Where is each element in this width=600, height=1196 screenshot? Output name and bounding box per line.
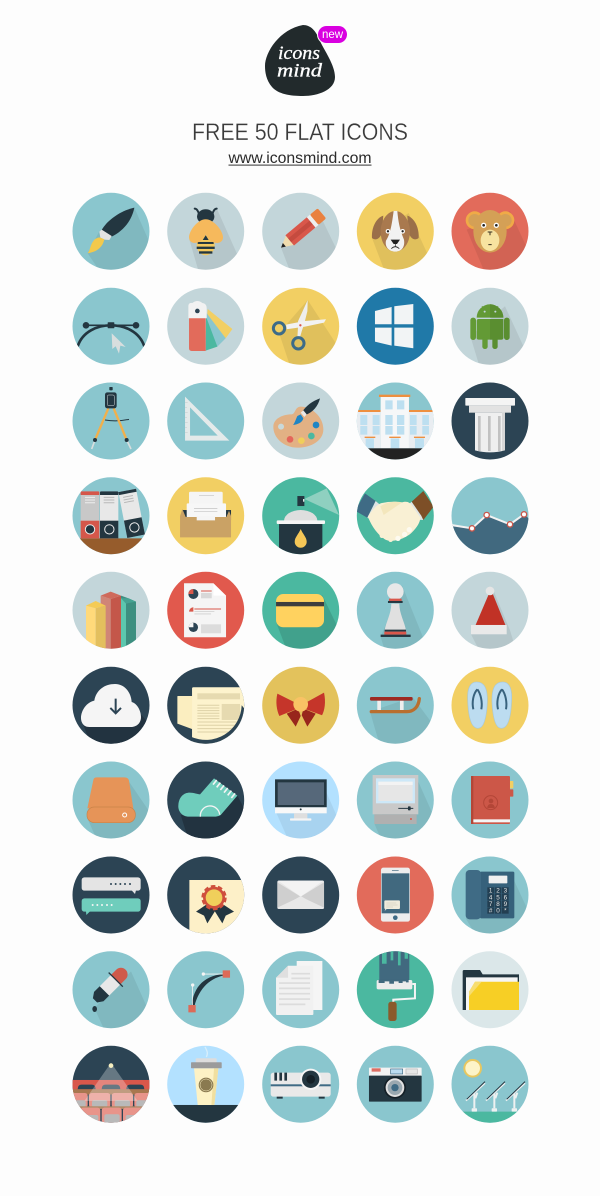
logo: iconsmind blob with new badge: new (322, 29, 344, 41)
icon: hard drive (73, 762, 150, 842)
website link: www.iconsmind.com (227, 150, 372, 167)
icon: set square (167, 383, 244, 459)
icon: monkey (452, 193, 530, 273)
icon: camera (357, 1046, 434, 1123)
icon: paper documents (262, 951, 339, 1028)
icon: smartphone (357, 857, 434, 933)
icon: bee (167, 193, 244, 273)
icon: chat bubbles (73, 857, 149, 933)
icon: newspaper (167, 667, 244, 745)
icon: desk telephone: 5 (496, 894, 500, 901)
icon: desk telephone (452, 857, 529, 937)
icon: desktop monitor (262, 762, 340, 842)
icon: cloud download (73, 667, 150, 747)
logo: iconsmind blob with new badge: mind (277, 60, 323, 82)
icon: chess pawn (357, 572, 434, 652)
icon: office building (357, 383, 434, 462)
icon: eyedropper (73, 951, 150, 1031)
icon: pencil (262, 193, 339, 273)
icon: paint brush (73, 193, 153, 273)
icon: pen tool curve (167, 951, 244, 1028)
icon: desk telephone: 3 (504, 888, 508, 895)
icon: 3d bar chart (73, 572, 149, 650)
icon: line chart (451, 477, 529, 556)
icon: spray can (262, 477, 339, 556)
icon: desk telephone: 4 (489, 894, 493, 901)
icon: bezier curve and cursor (73, 288, 149, 365)
icon: scissors (262, 288, 339, 368)
icon: desk telephone: 6 (504, 894, 508, 901)
icon: sock (167, 762, 245, 842)
title: FREE 50 FLAT ICONS (192, 119, 408, 146)
icon: credit card (262, 572, 340, 652)
icon: santa hat (452, 572, 528, 652)
icon: desk telephone: # (489, 908, 493, 915)
icon: folder (452, 951, 528, 1028)
icon: desk telephone: 2 (496, 888, 500, 895)
icon: desk telephone: 0 (496, 908, 500, 915)
icon: report document (167, 572, 244, 649)
icon: handshake (357, 477, 434, 554)
icon: retro computer (357, 762, 435, 842)
icon: sled (357, 667, 434, 747)
logo: iconsmind blob with new badge (265, 25, 348, 96)
icon: coffee cup (167, 1046, 244, 1125)
icon: desk telephone: * (504, 908, 507, 915)
icon: paint roller (357, 950, 434, 1028)
icon: flip flops (452, 667, 528, 744)
icon: projector (262, 1046, 339, 1123)
icon: award certificate (167, 857, 246, 937)
icon: binders on shelf (73, 477, 149, 555)
icon: desk telephone: 9 (504, 901, 508, 908)
icon: android (452, 288, 528, 368)
icon: desk telephone: 7 (489, 901, 493, 908)
icon: windows logo (357, 288, 434, 365)
icon: dog (357, 193, 434, 273)
icon: desk telephone: 8 (496, 901, 500, 908)
icon: colour swatch (167, 288, 244, 365)
icon: paint palette (262, 383, 339, 459)
icon: drawing compass (73, 383, 149, 459)
icon: solar panels (451, 1046, 529, 1125)
icon: red bow (262, 667, 339, 744)
icon: address book (452, 762, 528, 838)
icon: file box (167, 477, 244, 554)
icon: desk telephone: 1 (489, 888, 493, 895)
icon: envelope (262, 857, 339, 933)
icon: greek column (452, 383, 528, 459)
icon: theatre seats (71, 1046, 151, 1124)
logo: iconsmind blob with new badge: icons (278, 43, 320, 64)
